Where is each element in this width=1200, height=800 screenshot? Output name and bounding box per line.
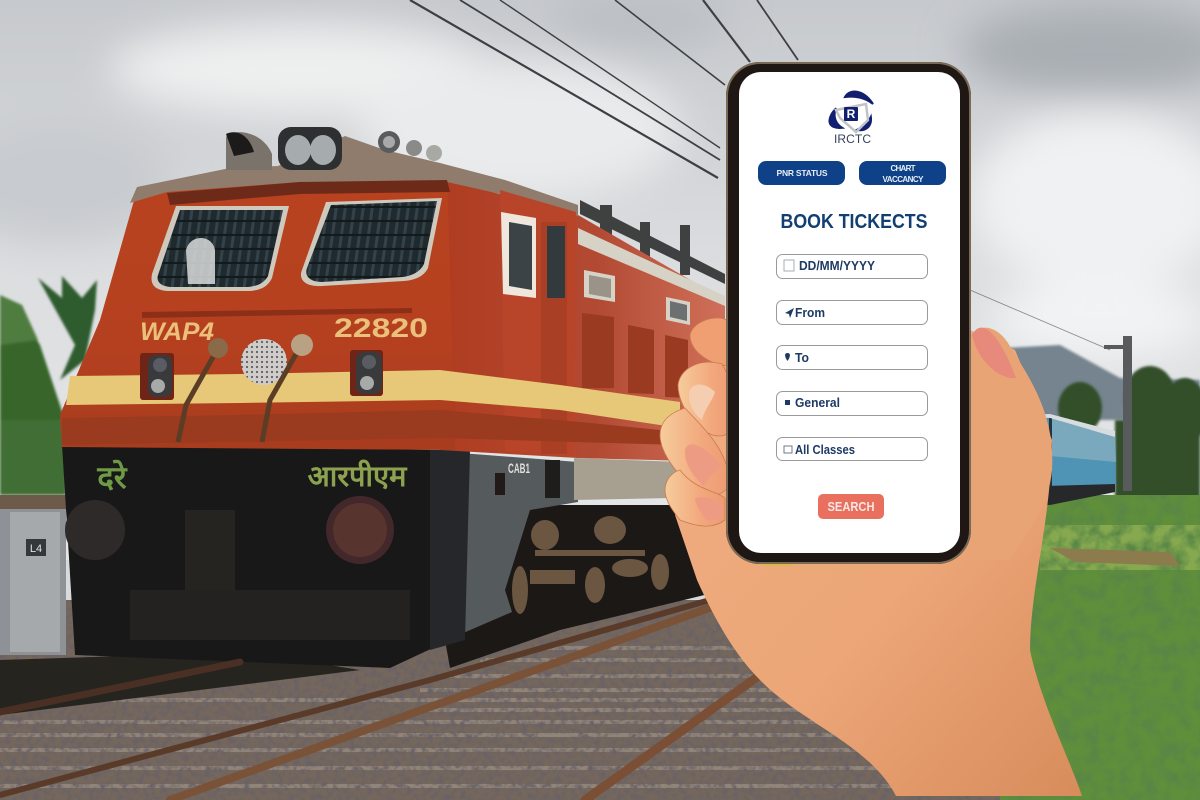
loco: hindi labels: दरे: [96, 459, 128, 495]
hand: thumb nail: [972, 328, 1016, 378]
railway tracks: [0, 600, 760, 800]
loco: beige skirt: [574, 458, 680, 500]
loco: underframe and front: [62, 445, 450, 668]
catenary mast: [1104, 336, 1132, 491]
button: pnr status: PNR STATUS: [776, 168, 828, 178]
loco: side body: [440, 178, 725, 462]
loco: cream stripe: [66, 370, 680, 428]
loco: grey side: [447, 453, 578, 640]
field: all classes: [776, 438, 928, 460]
field: to: [776, 346, 928, 370]
ground and ballast: [0, 600, 1000, 800]
hand: finger 4: [665, 470, 725, 526]
loco: side door: [500, 190, 576, 456]
button: chart vacancy: VACCANCY: [882, 175, 924, 184]
lineside cabinet: L4: [30, 543, 42, 555]
loco: bogie area: [445, 505, 725, 668]
locomotive: [60, 127, 725, 668]
hand: finger 1: [690, 318, 727, 366]
locomotive: 22820: [334, 313, 428, 343]
loco: right windscreen: [301, 198, 442, 286]
loco: dark recess under windows: [142, 308, 412, 318]
loco: buffers: [65, 496, 410, 640]
hand: finger 3: [660, 408, 730, 496]
background: cloudy sky: [0, 0, 1200, 560]
loco: roof equipment: [580, 200, 725, 284]
phone: screen: [739, 72, 960, 553]
heading: book tickects: BOOK TICKECTS: [780, 211, 928, 233]
loco: lower red band: [62, 410, 680, 445]
button: search: SEARCH: [828, 500, 874, 514]
loco: grab hoses: [178, 347, 300, 442]
background: palm trees left: [0, 276, 97, 495]
irctc logo: IRCTC: [834, 132, 871, 146]
field: from: [776, 300, 928, 324]
loco: roof and eyebrow: [130, 136, 578, 216]
button: search: [818, 494, 884, 519]
loco: headlamp housing: [226, 127, 442, 170]
hand: nails: [685, 384, 724, 521]
locomotive: आरपीएम: [308, 459, 408, 493]
phone: body: [726, 62, 971, 564]
overhead wires: [410, 0, 1110, 350]
button: chart vacancy: CHART: [890, 164, 916, 173]
hand: thumb: [968, 328, 1052, 560]
loco: QR emblem: [241, 339, 287, 385]
loco: left windscreen: [152, 206, 289, 291]
field: general: [776, 392, 928, 416]
loco: number labels: WAP4: [140, 318, 214, 346]
hand: finger 2: [678, 362, 734, 436]
grass field right: [1000, 495, 1200, 800]
field: to: To: [795, 351, 809, 365]
loco: side panels: [582, 270, 690, 398]
loco: marker lights: [140, 350, 383, 400]
field: date: [776, 254, 928, 278]
distant hill and trees right: [1005, 345, 1200, 500]
field: general: General: [795, 396, 840, 410]
loco: cab label: CAB1: [508, 460, 530, 476]
field: from: From: [795, 306, 825, 320]
loco: roof band: [578, 228, 725, 306]
button: pnr status: [758, 161, 845, 185]
field: date: DD/MM/YYYY: [799, 259, 876, 273]
phone: [726, 62, 971, 566]
irctc logo: R: [847, 107, 856, 121]
irctc logo: [829, 92, 873, 146]
hand: palm and wrist: [675, 330, 1082, 796]
blue passenger coaches: [975, 414, 1116, 505]
lineside cabinet: [0, 495, 66, 655]
field: all classes: All Classes: [795, 443, 855, 457]
hand holding phone: [660, 318, 1082, 796]
phone: yellow edge: [729, 520, 800, 566]
loco: front cab: [60, 172, 455, 450]
loco: hose couplers: [208, 334, 313, 358]
button: chart vacancy: [859, 161, 946, 185]
